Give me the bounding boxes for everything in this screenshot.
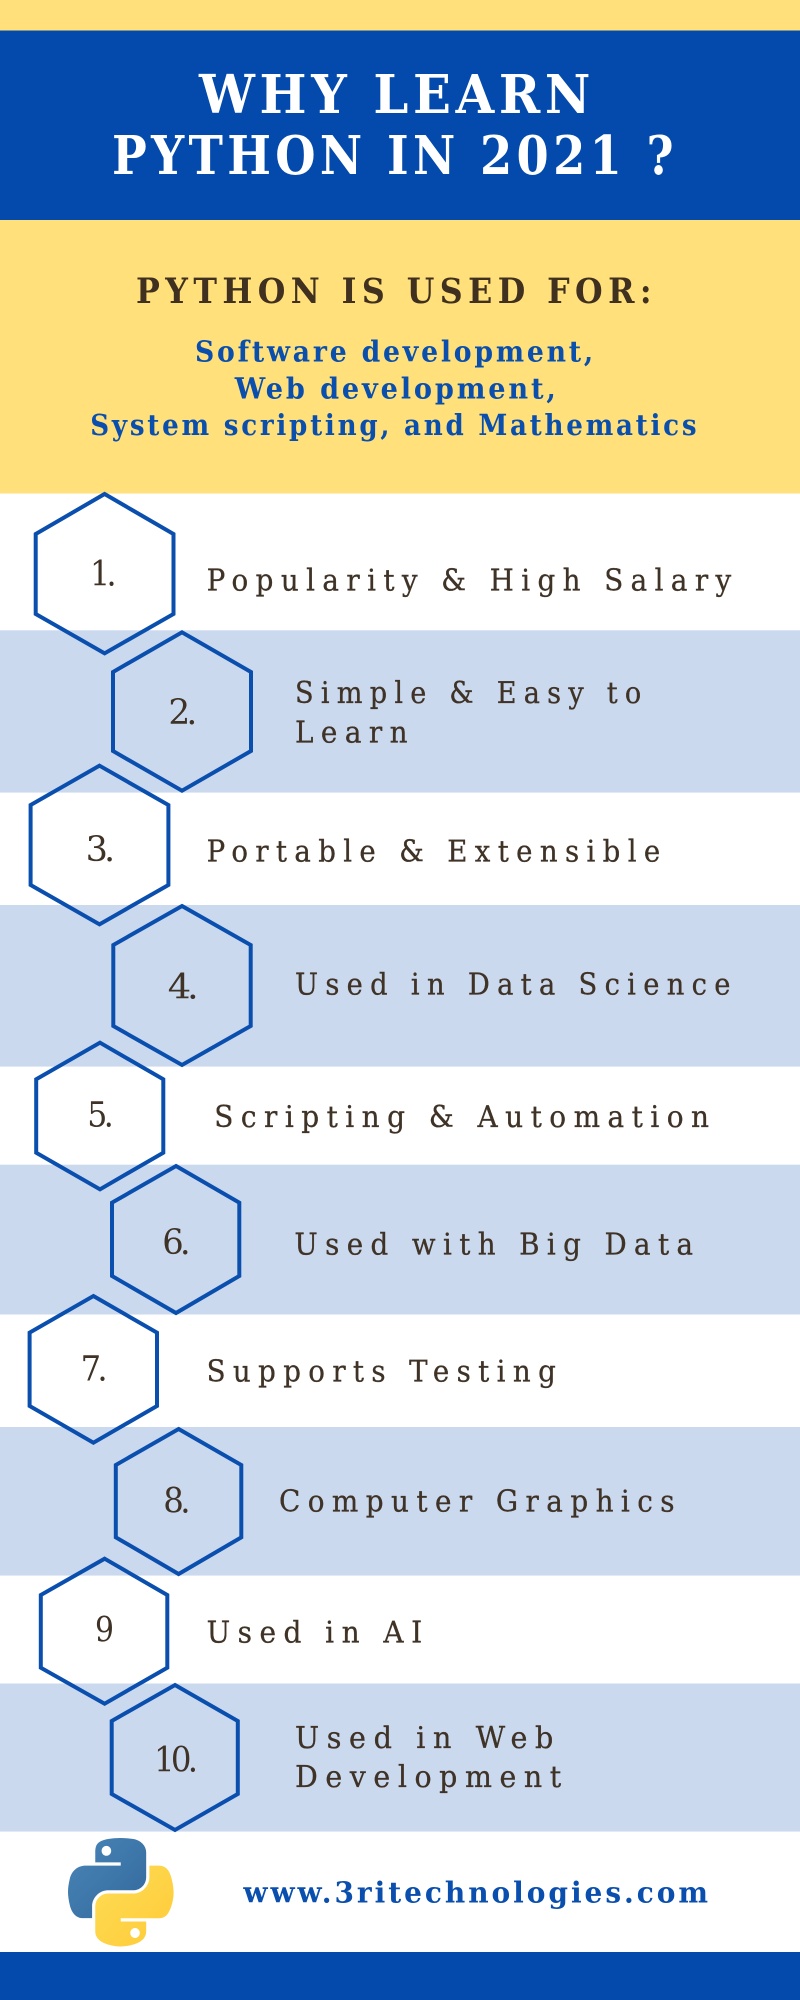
item 7 xyxy=(30,1296,563,1443)
item 6: 6. xyxy=(162,1223,188,1263)
item 2: 2. xyxy=(168,693,194,733)
item 4: Used in Data Science xyxy=(295,968,738,1003)
item 9: 9 xyxy=(95,1611,114,1651)
item 8: 8. xyxy=(163,1482,188,1522)
item 5: Scripting & Automation xyxy=(214,1100,717,1135)
panel: title banner xyxy=(0,30,800,220)
item 7: 7. xyxy=(81,1350,105,1390)
top yellow band xyxy=(0,0,800,31)
item 5: 5. xyxy=(87,1096,111,1136)
item 10: 10. xyxy=(154,1741,195,1781)
item 10 xyxy=(112,1685,569,1830)
item 9: Used in AI xyxy=(207,1615,430,1650)
item 1 xyxy=(36,494,739,653)
item 3: 3. xyxy=(86,830,112,870)
item 8 xyxy=(116,1429,682,1574)
item 6 xyxy=(112,1166,700,1313)
item 2: Simple & Easy to xyxy=(295,676,648,711)
item 8: Computer Graphics xyxy=(279,1484,682,1519)
website url: www.3ritechnologies.com xyxy=(242,1876,711,1910)
item 4 xyxy=(113,906,738,1065)
item 9 xyxy=(41,1559,430,1704)
usage list text xyxy=(90,335,699,442)
title xyxy=(112,63,678,187)
item 10: Development xyxy=(295,1760,569,1795)
title: WHY LEARN xyxy=(198,63,595,126)
item 10: Used in Web xyxy=(295,1721,561,1756)
usage list text: Software development, xyxy=(195,335,596,369)
item 3: Portable & Extensible xyxy=(207,834,668,869)
title: PYTHON IN 2021 ? xyxy=(112,124,678,187)
usage list text: Web development, xyxy=(234,371,559,405)
item 1: Popularity & High Salary xyxy=(207,563,739,598)
item 1: 1. xyxy=(90,555,114,595)
item 2 xyxy=(113,632,648,791)
item 4: 4. xyxy=(168,967,195,1007)
panel: python is used for xyxy=(0,220,800,494)
usage list text: System scripting, and Mathematics xyxy=(90,408,699,442)
item 5 xyxy=(36,1043,716,1189)
item 6: Used with Big Data xyxy=(294,1228,700,1263)
icon: python logo xyxy=(68,1838,174,1946)
item 2: Learn xyxy=(295,715,415,750)
bottom blue band xyxy=(0,1952,800,2000)
item 3 xyxy=(31,766,668,924)
item 7: Supports Testing xyxy=(207,1354,563,1389)
subheading: PYTHON IS USED FOR: xyxy=(136,271,657,312)
row backgrounds xyxy=(0,494,800,1952)
